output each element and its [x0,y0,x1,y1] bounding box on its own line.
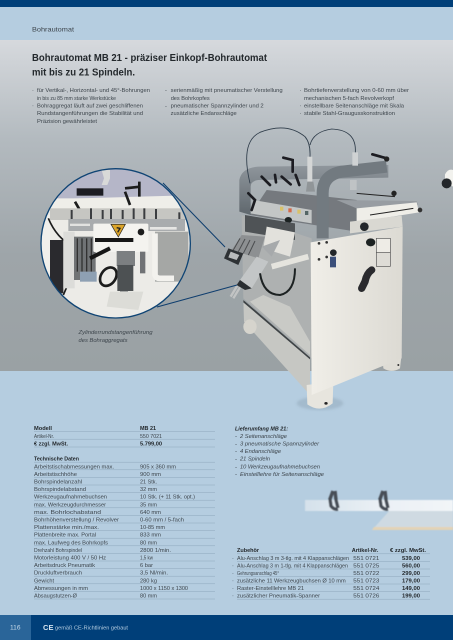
background top band [57,169,172,198]
table: technical data: 35 mm [140,502,157,508]
accessories table: Alu-Anschlag 3 m 1-tlg. mit 4 Klappanschlägen [237,563,348,569]
title [32,53,268,78]
table: technical data: 1000 x 1150 x 1300 [140,586,188,592]
table: technical data: 3,5 Nl/min. [140,571,168,577]
warning triangle [111,224,125,237]
table: technical data: Bohrspindelanzahl [34,479,82,485]
lower side rail [243,300,310,395]
table: model block: € zzgl. MwSt. [34,442,68,448]
accessories table: 299,00 [402,571,420,577]
hand lever [362,270,372,288]
scope of delivery list: 2 Seitenanschläge [239,434,287,440]
stop clamp 2 [380,491,388,509]
table: model block: Artikel-Nr. [34,434,54,440]
feature list: column 1: Präzision gewährleistet [37,119,97,125]
photo: boring machine [224,128,422,410]
feature list: column 3: · [300,111,302,117]
scope of delivery list: - [235,464,237,470]
table: technical data: max. Bohrlochabstand [34,510,101,516]
scope of delivery list: Einstelllehre für Seitenanschläge [240,472,324,478]
scope of delivery list: 21 Spindeln [239,457,270,463]
accessories table: 539,00 [402,556,420,562]
table: technical data: Bohrspindelabstand [34,487,86,493]
scope of delivery list: 4 Endanschläge [240,449,281,455]
table: technical data: Drehzahl Bohrspindel [34,548,82,554]
table: technical data: max. Laufweg des Bohrkopfs [34,540,108,546]
table: technical data: Plattenstärke min./max. [34,525,99,531]
feature list: column 3: mechanischen 5-fach Revolverkopf [304,96,394,102]
feature list: column 1: · [32,103,34,109]
scope of delivery list: Lieferumfang MB 21: [235,426,288,432]
feature list: column 2: serienmäßig mit pneumatischer Verstellung [171,88,283,94]
scope of delivery list [235,426,324,478]
table: technical data: Abmessungen in mm [34,586,88,592]
accessories table: Alu-Anschlag 3 m 3-tlg. mit 4 Klappanschlägen [237,556,349,562]
table: model block: 5.799,00 [140,442,162,448]
table: technical data: 833 mm [140,533,161,539]
photo caption: Zylinderrundstangenführung [77,330,153,336]
white guide pipe [272,257,308,267]
table: technical data: 2800 1/min. [140,548,171,554]
feature list: column 3: stabile Stahl-Graugusskonstruktion [304,111,395,117]
table: technical data: Plattenbreite max. Portal [34,533,96,539]
left cabinet [40,215,50,295]
callout lines to magnifier [157,183,237,307]
black connectors [90,240,133,258]
accessories table: 179,00 [402,578,420,584]
table: technical data: Bohrhöhenverstellung / Revolver [34,518,119,524]
table: technical data: 640 mm [140,510,161,516]
table: model block [34,426,215,448]
white L pipe [155,233,174,278]
control strip [250,200,312,223]
accessories table: 551 0721 [353,556,379,562]
feature list: column 2: pneumatischer Spannzylinder und 2 [171,103,264,109]
table: technical data: Arbeitsdruck Pneumatik [34,563,95,569]
air hoses [247,128,355,183]
right housing [155,232,188,282]
title: Bohrautomat MB 21 - präziser Einkopf-Bohrautomat [32,53,268,64]
motor [74,237,96,280]
accessories table: · [232,571,234,577]
stop clamp 1 [330,491,338,509]
front panel [311,227,403,395]
feature list: column 1: · [32,88,34,94]
rail [78,196,174,198]
upper table [250,190,357,232]
feature list: column 3: · [300,88,302,94]
photo: side stops and board [305,491,453,530]
scope of delivery list: - [235,472,237,478]
table: model block: Modell [34,426,52,432]
accessories table: 551 0724 [353,586,379,592]
spindle bar [68,219,185,231]
accessories table: zusätzliche 11 Werkzeugbuchsen Ø 10 mm [237,578,346,584]
scope of delivery list: 10 Werkzeugaufnahmebuchsen [240,464,320,470]
CE mark: C [43,623,49,632]
table: technical data: 280 kg [140,578,157,584]
instruction plates [376,238,390,252]
feature list: column 2: - [165,103,167,109]
accessories header: Artikel-Nr. [352,548,379,554]
scope of delivery list: 3 pneumatische Spannzylinder [240,442,320,448]
feature list: column 1: für Vertikal-, Horizontal- und 45°-Bohrungen [37,88,150,94]
table: technical data [34,457,215,600]
feature list: column 3 [300,88,409,117]
title: mit bis zu 21 Spindeln. [32,68,135,78]
table: technical data: 0-60 mm / 5-fach [140,518,184,524]
drill unit [240,257,268,288]
table: technical data: 900 mm [140,472,161,478]
top bar [0,0,453,7]
table: model block: 550 7021 [140,434,162,440]
feature list: column 2 [165,88,283,117]
accessories header: Zubehör [237,548,260,554]
inner cabinet [242,215,312,358]
table: technical data: 1,5 kw [140,556,154,562]
board [372,505,453,530]
table: technical data: Absaugstutzen-Ø [34,594,78,600]
table: technical data: 80 mm [140,594,157,600]
accessories table: Raster-Einstelllehre MB 21 [237,586,304,592]
accessories table: · [232,563,234,569]
boring unit [245,215,295,240]
CE note: gemäß CE-Richtlinien gebaut [55,626,128,632]
accessories table: 551 0725 [353,563,379,569]
feature list: column 1: Rundstangenführungen die Stabilität und [37,111,143,117]
belt [98,266,118,288]
table: technical data: Werkzeugaufnahmebuchsen [34,495,107,501]
page number: 116 [10,626,21,632]
table: technical data: 21 Stk. [140,479,157,485]
drill bits row [50,208,190,220]
specification table [34,426,215,600]
CE mark [43,623,54,632]
motor terminal box [224,248,243,265]
table: technical data: 6 bar [140,563,153,569]
table: technical data: Technische Daten [34,457,79,463]
feet [243,319,257,334]
table: technical data: Druckluftverbrauch [34,571,82,577]
accessories table: · [232,578,234,584]
magnified detail circle [40,168,193,318]
second machine detail at right edge [442,170,453,188]
floor [107,292,143,310]
accessories table [232,548,430,600]
accessories table: · [232,586,234,592]
table: technical data: Gewicht [34,578,54,584]
belt [260,268,295,295]
feature list: column 1: Bohraggregat läuft auf zwei geschliffenen [37,103,143,109]
table: technical data: 905 x 360 mm [140,464,176,470]
accessories table: 560,00 [402,563,420,569]
scope of delivery list: - [235,449,237,455]
drill cylinder [117,251,135,266]
feature list: column 2: zusätzliche Endanschläge [171,111,237,117]
accessories header: € zzgl. MwSt. [390,548,426,554]
feature list: column 3: Bohrtiefenverstellung von 0-60 mm über [304,88,409,94]
accessories header [237,548,426,554]
table: technical data: 10 Stk. (+ 11 Stk. opt.) [140,495,195,501]
table: technical data: Motorleistung 400 V / 50 Hz [34,556,106,562]
accessories table: 551 0726 [353,594,379,600]
motor [232,235,265,258]
white carriage [93,224,148,252]
footer bar [0,615,453,640]
scope of delivery list: - [235,442,237,448]
accessories table: 199,00 [402,594,420,600]
accessories table: zusätzlicher Pneumatik-Spanner [237,594,320,600]
feature list: column 2: des Bohrkopfes [171,96,210,102]
feature list: column 2: - [165,88,167,94]
table: technical data: max. Werkzeugdurchmesser [34,502,106,508]
table: technical data: 32 mm [140,487,157,493]
guide rod [140,252,145,273]
section label: Bohrautomat [32,26,74,34]
photo caption: des Bohraggregats [78,338,128,344]
table: technical data: Arbeitstischabmessungen max. [34,464,114,470]
photo caption [77,330,153,344]
clamps and levers [248,154,387,210]
table: technical data: 10-85 mm [140,525,165,531]
accessories table: 149,00 [402,586,420,592]
tall spindle cylinders [307,157,312,182]
accessories table: · [232,594,234,600]
table: technical data: 80 mm [140,540,157,546]
table: model block: MB 21 [140,426,156,432]
scope of delivery list: - [235,434,237,440]
feature list: column 1 [32,88,150,125]
accessories table: · [232,556,234,562]
metal arch frame [239,165,388,215]
accessories table: 551 0723 [353,578,379,584]
machine shadow [297,397,343,410]
feature list: column 3: · [300,103,302,109]
feature list: column 3: einstellbare Seitenanschläge mit Skala [304,103,405,109]
accessories table: Gehrungsanschlag 45° [237,571,279,577]
feature list: column 1: in bis zu 85 mm starke Werkstücke [37,96,116,102]
CE mark: E [48,623,54,632]
scope of delivery list: - [235,457,237,463]
accessories table: 551 0722 [353,571,379,577]
fence bar [305,500,453,511]
table: technical data: Arbeitstischhöhe [34,472,77,478]
